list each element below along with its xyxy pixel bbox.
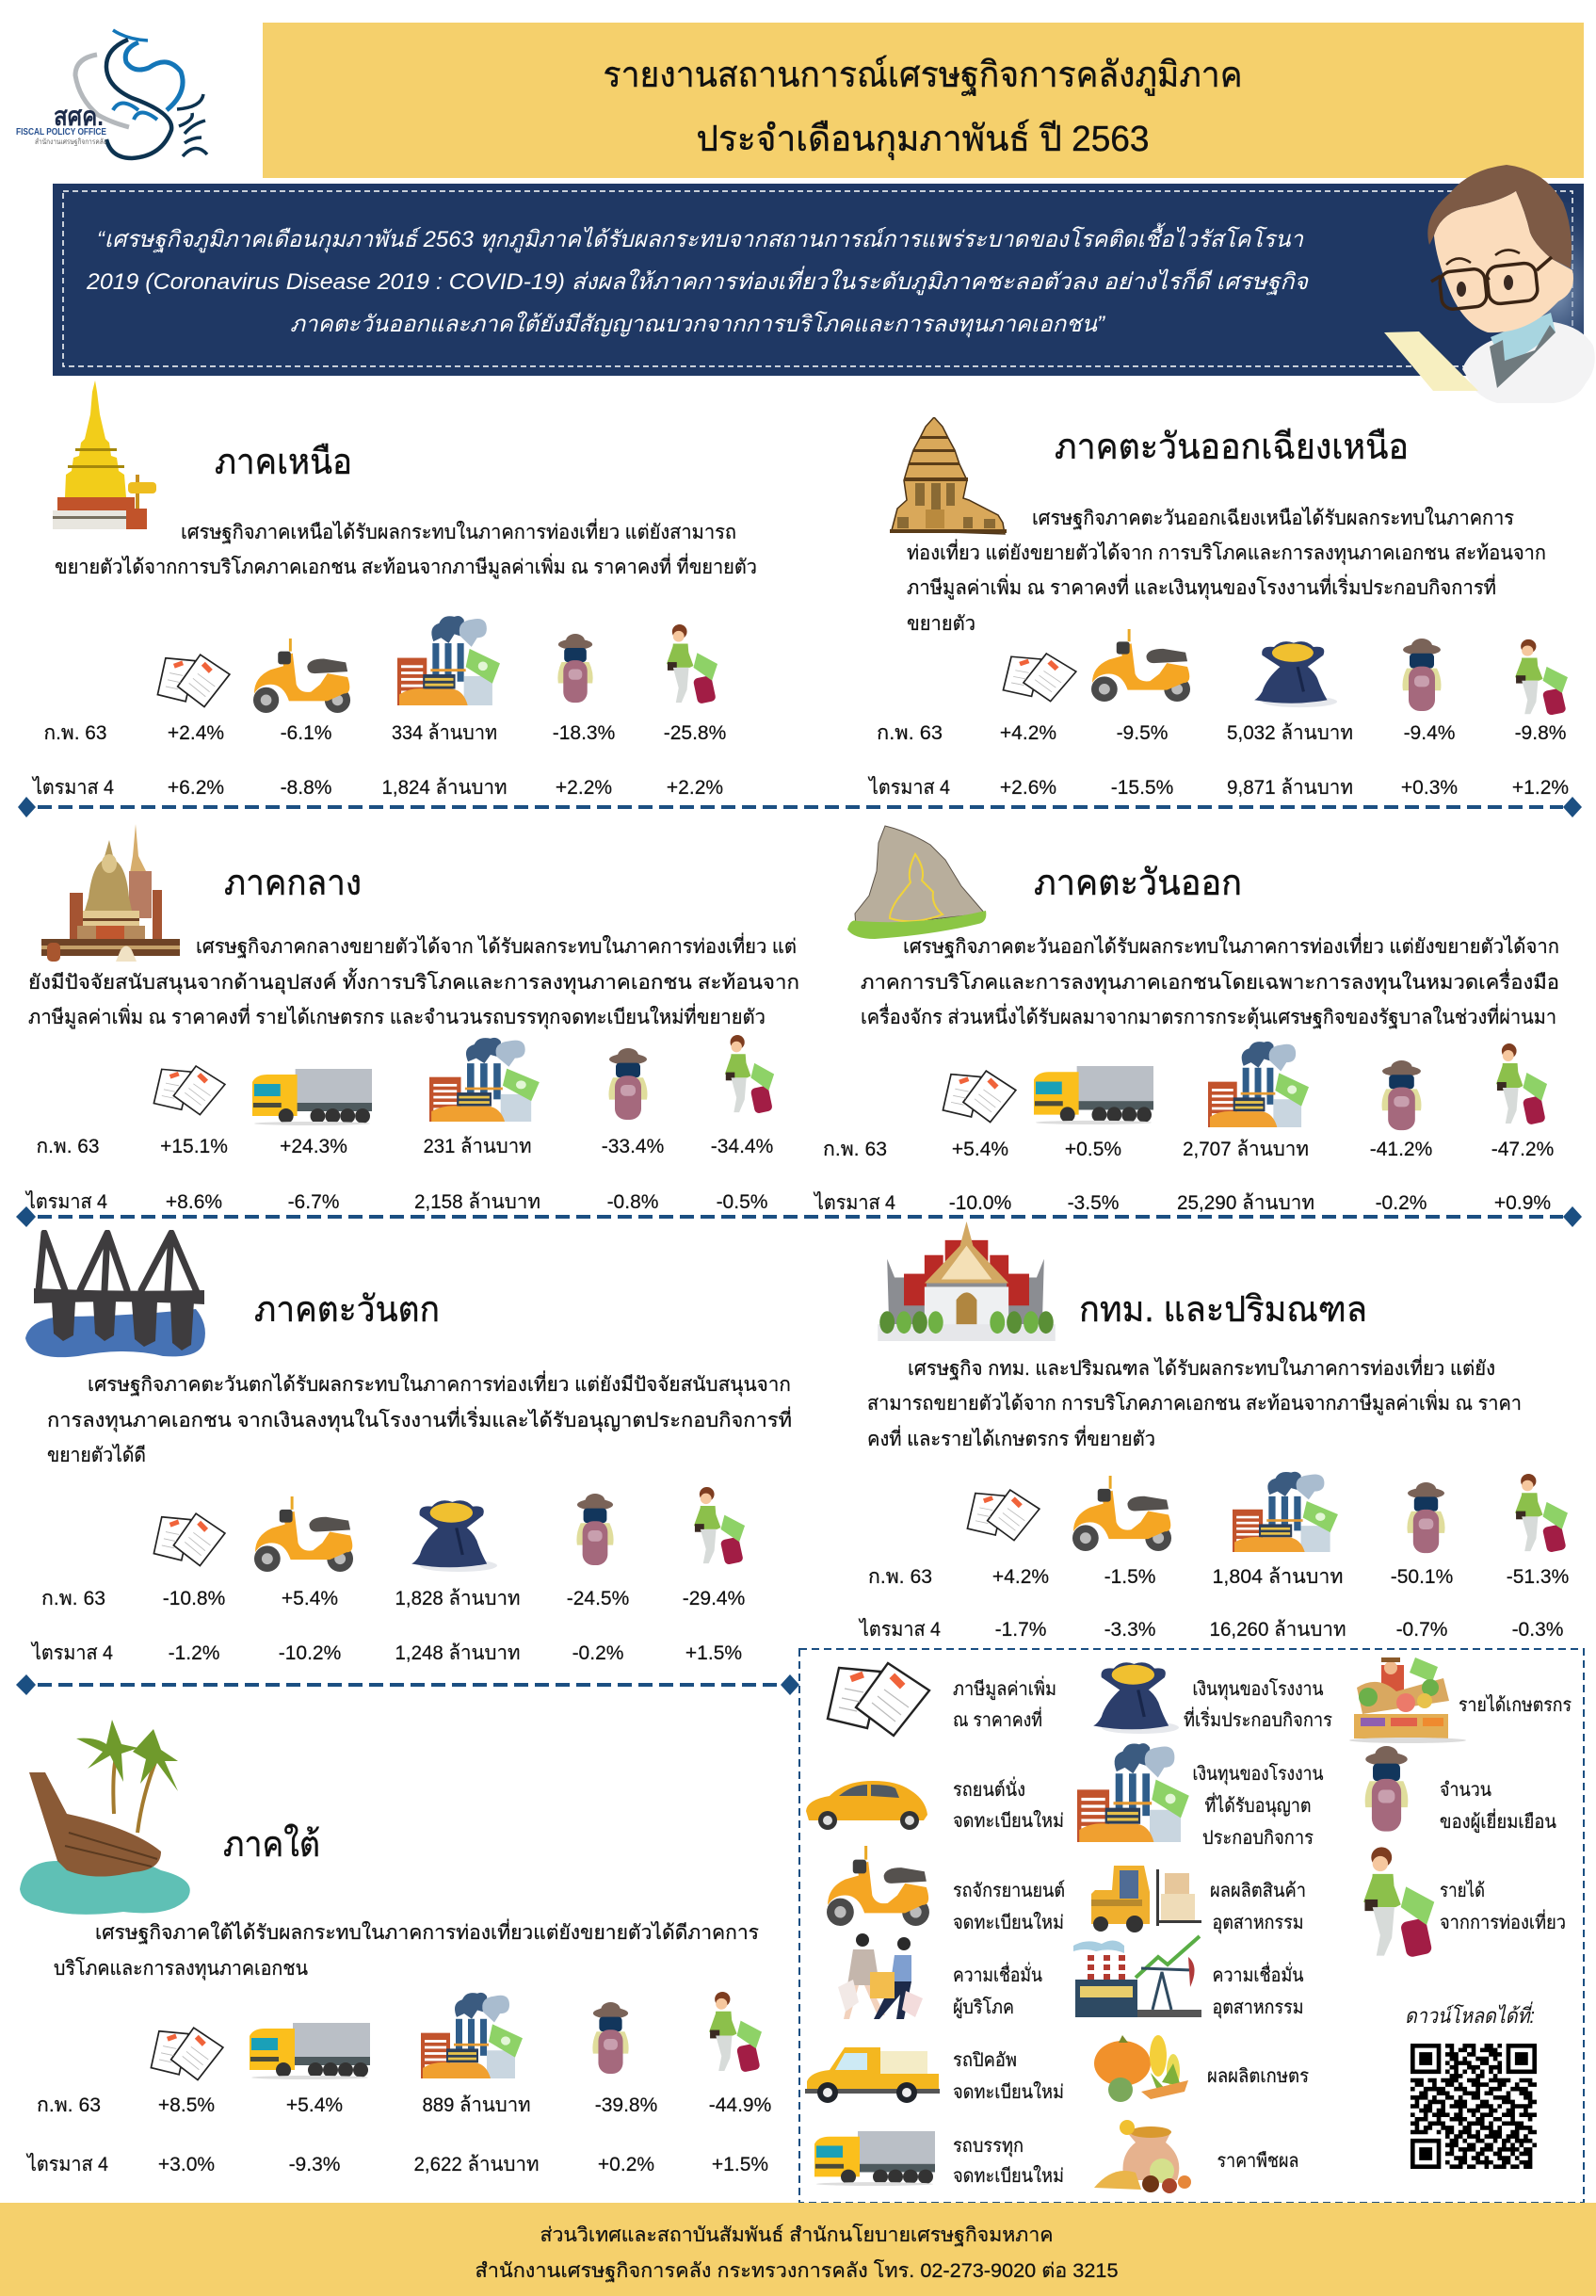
footer line 2: สำนักงานเศรษฐกิจการคลัง กระทรวงการคลัง โทร. 02-273-9020 ต่อ 3215 [475, 2259, 1119, 2282]
QR code [1411, 2044, 1537, 2169]
icon: doctor character [1384, 165, 1595, 403]
divider 1 [18, 797, 1582, 817]
row: February 2020 values: +4.2% [1000, 722, 1056, 744]
legend: industrial confidence [1073, 1936, 1304, 2019]
quote line 1: “เศรษฐกิจภูมิภาคเดือนกุมภาพันธ์ 2563 ทุกภูมิภาคได้รับผลกระทบจากสถานการณ์การแพร่ระบาดของโรคติดเชื้อไวรัสโคโรนา [97, 222, 1305, 253]
heading: ภาคตะวันออกเฉียงเหนือ [1055, 428, 1409, 467]
row: Q4 values: +0.9% [1494, 1192, 1551, 1214]
body text: เศรษฐกิจภาคตะวันออกเฉียงเหนือได้รับผลกระทบในภาคการ [1032, 507, 1514, 529]
row: Q4 values: +3.0% [158, 2154, 215, 2175]
row: February 2020 values: -6.1% [281, 722, 331, 744]
indicator icons [943, 1042, 1547, 1130]
row: February 2020 values: +5.4% [952, 1139, 1008, 1160]
logo: Fiscal Policy Office: สำนักงานเศรษฐกิจการคลัง [35, 137, 106, 146]
body text [54, 1918, 759, 1981]
icon: Buddha and ruins [41, 825, 180, 962]
row: February 2020 values: -25.8% [664, 722, 726, 744]
row: February 2020 values: ก.พ. 63 [41, 1588, 105, 1609]
row: Q4 values: ไตรมาส 4 [24, 1190, 107, 1213]
row: Q4 values: ไตรมาส 4 [858, 1618, 941, 1641]
row: Q4 values: +1.2% [1512, 777, 1569, 799]
legend: motorcycle: รถจักรยานยนต์ [953, 1880, 1065, 1901]
legend: visitors [1365, 1746, 1556, 1834]
icon: golden chedi [53, 380, 156, 529]
legend: industrial confidence: อุตสาหกรรม [1213, 1997, 1303, 2019]
legend: VAT: ณ ราคาคงที่ [953, 1706, 1042, 1731]
legend: motorcycle: จดทะเบียนใหม่ [953, 1912, 1064, 1933]
logo: Fiscal Policy Office: สศค. [54, 102, 104, 131]
row: February 2020 values: -10.8% [163, 1588, 225, 1609]
row: Q4 values: ไตรมาส 4 [31, 776, 114, 799]
row: February 2020 values: ก.พ. 63 [36, 1136, 100, 1157]
row: February 2020 values: ก.พ. 63 [868, 1566, 932, 1588]
row: February 2020 values [868, 1566, 1569, 1588]
row: Q4 values: 2,622 ล้านบาท [414, 2154, 539, 2175]
row: February 2020 values: 889 ล้านบาท [422, 2094, 531, 2116]
row: February 2020 values: 5,032 ล้านบาท [1227, 722, 1353, 744]
row: Q4 values [813, 1191, 1551, 1214]
panel: South [20, 1720, 771, 2175]
legend: capital of licensed factories: ที่ได้รับอนุญาต [1205, 1792, 1311, 1818]
body text: เศรษฐกิจภาคเหนือได้รับผลกระทบในภาคการท่องเที่ยว แต่ยังสามารถ [181, 518, 736, 543]
row: Q4 values: +1.5% [685, 1642, 742, 1664]
row: Q4 values: 9,871 ล้านบาท [1227, 777, 1353, 799]
body text: ภาคการบริโภคและการลงทุนภาคเอกชนโดยเฉพาะการลงทุนในหมวดเครื่องมือ [861, 968, 1559, 994]
legend: VAT: ภาษีมูลค่าเพิ่ม [953, 1675, 1056, 1701]
body text [47, 1370, 792, 1466]
title banner [263, 23, 1584, 178]
row: February 2020 values: -34.4% [711, 1136, 773, 1157]
row: February 2020 values: -9.5% [1117, 722, 1168, 744]
legend: capital of new factories [1093, 1662, 1332, 1734]
quote line 3: ภาคตะวันออกและภาคใต้ยังมีสัญญาณบวกจากการบริโภคและการลงทุนภาคเอกชน” [290, 311, 1105, 338]
icon: Khmer prasat [890, 417, 1007, 535]
row: February 2020 values [823, 1139, 1554, 1160]
row: February 2020 values: 2,707 ล้านบาท [1183, 1139, 1309, 1160]
legend: agricultural output [1094, 2035, 1309, 2102]
body text [907, 507, 1546, 635]
row: Q4 values: 1,824 ล้านบาท [382, 777, 507, 799]
legend: tourism income: จากการท่องเที่ยว [1440, 1909, 1566, 1933]
legend: farm income: รายได้เกษตรกร [1459, 1694, 1572, 1716]
row: February 2020 values: -24.5% [567, 1588, 629, 1609]
row: Q4 values [867, 776, 1569, 799]
row: Q4 values: +8.6% [166, 1191, 222, 1213]
indicator icons [153, 1487, 745, 1572]
row: February 2020 values: +15.1% [160, 1136, 228, 1157]
legend: capital of licensed factories: เงินทุนของโรงงาน [1192, 1763, 1324, 1786]
panel: West [25, 1233, 792, 1664]
legend: passenger car [806, 1776, 1064, 1832]
legend: industrial output [1091, 1866, 1306, 1934]
row: February 2020 values: ก.พ. 63 [37, 2094, 101, 2116]
indicator icons [153, 1035, 774, 1125]
body text: คงที่ และรายได้เกษตรกร ที่ขยายตัว [867, 1425, 1155, 1450]
title line 2: ประจำเดือนกุมภาพันธ์ ปี 2563 [697, 119, 1149, 160]
row: February 2020 values: -47.2% [1491, 1139, 1554, 1160]
row: Q4 values: -3.3% [1104, 1619, 1155, 1641]
row: February 2020 values: ก.พ. 63 [43, 722, 107, 744]
row: February 2020 values: -29.4% [683, 1588, 745, 1609]
row: February 2020 values: ก.พ. 63 [877, 722, 943, 744]
legend: motorcycle [827, 1846, 1065, 1933]
panel: Central [24, 824, 799, 1213]
legend: industrial confidence: ความเชื่อมั่น [1213, 1962, 1304, 1986]
body text: ขยายตัวได้จากการบริโภคภาคเอกชน สะท้อนจากภาษีมูลค่าเพิ่ม ณ ราคาคงที่ ที่ขยายตัว [55, 553, 757, 579]
legend: visitors: จำนวน [1440, 1780, 1491, 1801]
body text: ขยายตัว [907, 613, 975, 635]
heading: กทม. และปริมณฑล [1079, 1290, 1367, 1330]
title line 1: รายงานสถานการณ์เศรษฐกิจการคลังภูมิภาค [603, 55, 1243, 96]
legend: passenger car: รถยนต์นั่ง [953, 1776, 1025, 1801]
row: Q4 values: ไตรมาส 4 [30, 1641, 113, 1664]
divider 3 [16, 1674, 799, 1695]
row: Q4 values: -0.2% [1376, 1192, 1427, 1214]
legend: industrial output: อุตสาหกรรม [1213, 1913, 1303, 1934]
legend: capital of licensed factories: ประกอบกิจการ [1202, 1828, 1314, 1849]
body text: สามารถขยายตัวได้จาก การบริโภคภาคเอกชน สะท้อนจากภาษีมูลค่าเพิ่ม ณ ราคา [867, 1389, 1522, 1415]
divider 2 [16, 1206, 1582, 1227]
row: February 2020 values: -33.4% [602, 1136, 664, 1157]
row: Q4 values: ไตรมาส 4 [867, 776, 950, 799]
row: Q4 values: +0.3% [1401, 777, 1458, 799]
row: February 2020 values: -1.5% [1104, 1566, 1155, 1588]
row: February 2020 values [36, 1136, 773, 1157]
row: Q4 values: -1.7% [995, 1619, 1046, 1641]
legend: pickup [805, 2047, 1064, 2103]
legend: consumer confidence [838, 1933, 1042, 2019]
panel: legend [799, 1649, 1584, 2203]
row: Q4 values: ไตรมาส 4 [813, 1191, 895, 1214]
row: February 2020 values [41, 1588, 745, 1609]
row: Q4 values: -3.5% [1068, 1192, 1119, 1214]
row: Q4 values: +2.2% [556, 777, 612, 799]
legend: crop prices [1094, 2120, 1299, 2193]
legend: capital of new factories: เงินทุนของโรงงาน [1192, 1678, 1324, 1701]
body text [867, 1354, 1522, 1450]
row: February 2020 values: -50.1% [1391, 1566, 1453, 1588]
row: February 2020 values: +24.3% [280, 1136, 347, 1157]
row: Q4 values: -10.2% [279, 1642, 341, 1664]
row: Q4 values: -0.5% [717, 1191, 767, 1213]
row: February 2020 values: -18.3% [553, 722, 615, 744]
body text: บริโภคและการลงทุนภาคเอกชน [54, 1957, 308, 1981]
row: Q4 values: +1.5% [712, 2154, 768, 2175]
body text: เครื่องจักร ส่วนหนึ่งได้รับผลมาจากมาตรการกระตุ้นเศรษฐกิจของรัฐบาลในช่วงที่ผ่านมา [861, 1003, 1556, 1029]
icon: wooden bridge [25, 1230, 205, 1358]
legend: agricultural output: ผลผลิตเกษตร [1207, 2066, 1309, 2087]
logo: Fiscal Policy Office [16, 30, 207, 158]
row: Q4 values [30, 1641, 742, 1664]
legend: industrial output: ผลผลิตสินค้า [1210, 1881, 1306, 1901]
row: Q4 values: +2.6% [1000, 777, 1056, 799]
row: February 2020 values: +4.2% [992, 1566, 1049, 1588]
legend: visitors: ของผู้เยี่ยมเยือน [1440, 1808, 1556, 1834]
icon: marble temple [878, 1221, 1056, 1341]
legend: tourism income: รายได้ [1440, 1880, 1485, 1901]
row: Q4 values: -9.3% [289, 2154, 340, 2175]
row: February 2020 values: ก.พ. 63 [823, 1139, 887, 1160]
body text: การลงทุนภาคเอกชน จากเงินลงทุนในโรงงานที่เริ่มและได้รับอนุญาตประกอบกิจการที่ [47, 1406, 792, 1432]
legend: consumer confidence: ความเชื่อมั่น [953, 1962, 1042, 1986]
row: February 2020 values: +5.4% [282, 1588, 338, 1609]
heading: ภาคเหนือ [215, 443, 352, 482]
row: February 2020 values [43, 722, 726, 744]
row: February 2020 values: 1,828 ล้านบาท [395, 1588, 520, 1609]
row: Q4 values [858, 1618, 1563, 1641]
heading: ภาคตะวันออก [1034, 864, 1242, 903]
row: February 2020 values: -39.8% [595, 2094, 657, 2116]
indicator icons [151, 1992, 762, 2080]
row: February 2020 values: -44.9% [709, 2094, 771, 2116]
body text: ท่องเที่ยว แต่ยังขยายตัวได้จาก การบริโภคและการลงทุนภาคเอกชน สะท้อนจาก [907, 539, 1546, 565]
row: Q4 values: -1.2% [169, 1642, 219, 1664]
row: Q4 values: -0.7% [1396, 1619, 1447, 1641]
row: Q4 values [25, 2153, 768, 2175]
footer [0, 2203, 1596, 2296]
body text: ภาษีมูลค่าเพิ่ม ณ ราคาคงที่ และเงินทุนของโรงงานที่เริ่มประกอบกิจการที่ [907, 574, 1496, 600]
row: Q4 values: ไตรมาส 4 [25, 2153, 108, 2175]
row: Q4 values [24, 1190, 767, 1213]
quote line 2: 2019 (Coronavirus Disease 2019 : COVID-19) ส่งผลให้ภาคการท่องเที่ยวในระดับภูมิภาคชะลอตัวลง อย่างไรก็ดี เศรษฐกิจ [86, 266, 1309, 296]
row: February 2020 values: -9.8% [1515, 722, 1566, 744]
body text: เศรษฐกิจภาคกลางขยายตัวได้จาก ได้รับผลกระทบในภาคการท่องเที่ยว แต่ [196, 932, 797, 958]
legend: capital of new factories: ที่เริ่มประกอบกิจการ [1184, 1706, 1332, 1731]
row: February 2020 values: +0.5% [1065, 1139, 1121, 1160]
row: February 2020 values: 334 ล้านบาท [392, 722, 497, 744]
icon: Buddha on rock [847, 825, 987, 939]
row: February 2020 values [877, 722, 1566, 744]
legend: pickup: รถปิคอัพ [953, 2050, 1017, 2071]
body text: เศรษฐกิจ กทม. และปริมณฑล ได้รับผลกระทบในภาคการท่องเที่ยว แต่ยัง [908, 1354, 1495, 1380]
panel: North [31, 380, 757, 799]
heading: ภาคตะวันตก [254, 1290, 440, 1330]
indicator icons [1003, 629, 1568, 716]
body text: เศรษฐกิจภาคตะวันออกได้รับผลกระทบในภาคการท่องเที่ยว แต่ยังขยายตัวได้จาก [903, 932, 1559, 958]
row: Q4 values: +6.2% [168, 777, 224, 799]
row: February 2020 values: -9.4% [1404, 722, 1455, 744]
row: February 2020 values: +5.4% [286, 2094, 343, 2116]
panel: Bangkok and vicinity [858, 1221, 1569, 1641]
row: Q4 values: 25,290 ล้านบาท [1177, 1192, 1314, 1214]
row: Q4 values: +2.2% [667, 777, 723, 799]
panel: Northeast [867, 417, 1569, 799]
row: February 2020 values: +8.5% [158, 2094, 215, 2116]
summary quote panel [53, 184, 1584, 376]
row: February 2020 values: 231 ล้านบาท [424, 1136, 531, 1157]
body text: เศรษฐกิจภาคใต้ได้รับผลกระทบในภาคการท่องเที่ยวแต่ยังขยายตัวได้ดีภาคการ [95, 1918, 759, 1944]
legend: crop prices: ราคาพืชผล [1217, 2151, 1299, 2172]
legend: truck [814, 2131, 1064, 2187]
footer line 1: ส่วนวิเทศและสถาบันสัมพันธ์ สำนักนโยบายเศรษฐกิจมหภาค [540, 2223, 1053, 2246]
row: Q4 values [31, 776, 723, 799]
row: Q4 values: 16,260 ล้านบาท [1209, 1619, 1346, 1641]
row: Q4 values: -0.3% [1512, 1619, 1563, 1641]
body text: ยังมีปัจจัยสนับสนุนจากด้านอุปสงค์ ทั้งการบริโภคและการลงทุนภาคเอกชน สะท้อนจาก [28, 968, 799, 994]
row: February 2020 values [37, 2094, 771, 2116]
row: Q4 values: +0.2% [598, 2154, 654, 2175]
row: Q4 values: -10.0% [949, 1192, 1011, 1214]
legend: VAT [828, 1663, 1056, 1736]
row: Q4 values: 1,248 ล้านบาท [395, 1642, 520, 1664]
indicator icons [967, 1472, 1568, 1553]
legend: capital of licensed factories [1077, 1743, 1324, 1849]
heading: ภาคใต้ [223, 1824, 320, 1865]
body text: เศรษฐกิจภาคตะวันตกได้รับผลกระทบในภาคการท่องเที่ยว แต่ยังมีปัจจัยสนับสนุนจาก [88, 1370, 791, 1397]
legend: consumer confidence: ผู้บริโภค [953, 1997, 1014, 2019]
row: February 2020 values: +2.4% [168, 722, 224, 744]
icon: boat and palm trees [20, 1720, 190, 1915]
heading: ภาคกลาง [224, 864, 362, 903]
body text [55, 518, 757, 579]
legend: tourism income [1363, 1847, 1566, 1958]
legend: truck: จดทะเบียนใหม่ [953, 2165, 1064, 2187]
logo: Fiscal Policy Office: FISCAL POLICY OFFICE [16, 127, 106, 137]
row: Q4 values: -8.8% [281, 777, 331, 799]
row: Q4 values: -6.7% [288, 1191, 339, 1213]
legend: farm income [1349, 1657, 1572, 1743]
panel: East [813, 826, 1559, 1214]
legend: passenger car: จดทะเบียนใหม่ [953, 1810, 1064, 1832]
legend: truck: รถบรรทุก [953, 2136, 1024, 2158]
row: February 2020 values: -41.2% [1370, 1139, 1432, 1160]
download label: ดาวน์โหลดได้ที่: [1405, 2001, 1535, 2028]
row: Q4 values: -15.5% [1111, 777, 1173, 799]
row: February 2020 values: 1,804 ล้านบาท [1213, 1566, 1343, 1588]
row: Q4 values: -0.8% [607, 1191, 658, 1213]
body text: ขยายตัวได้ดี [47, 1444, 146, 1466]
indicator icons [157, 616, 717, 713]
legend: pickup: จดทะเบียนใหม่ [953, 2081, 1064, 2103]
row: February 2020 values: -51.3% [1507, 1566, 1569, 1588]
body text [28, 932, 799, 1029]
row: Q4 values: 2,158 ล้านบาท [414, 1191, 540, 1213]
row: Q4 values: -0.2% [572, 1642, 623, 1664]
body text: ภาษีมูลค่าเพิ่ม ณ ราคาคงที่ รายได้เกษตรกร และจำนวนรถบรรทุกจดทะเบียนใหม่ที่ขยายตัว [28, 1003, 766, 1029]
body text [861, 932, 1559, 1029]
